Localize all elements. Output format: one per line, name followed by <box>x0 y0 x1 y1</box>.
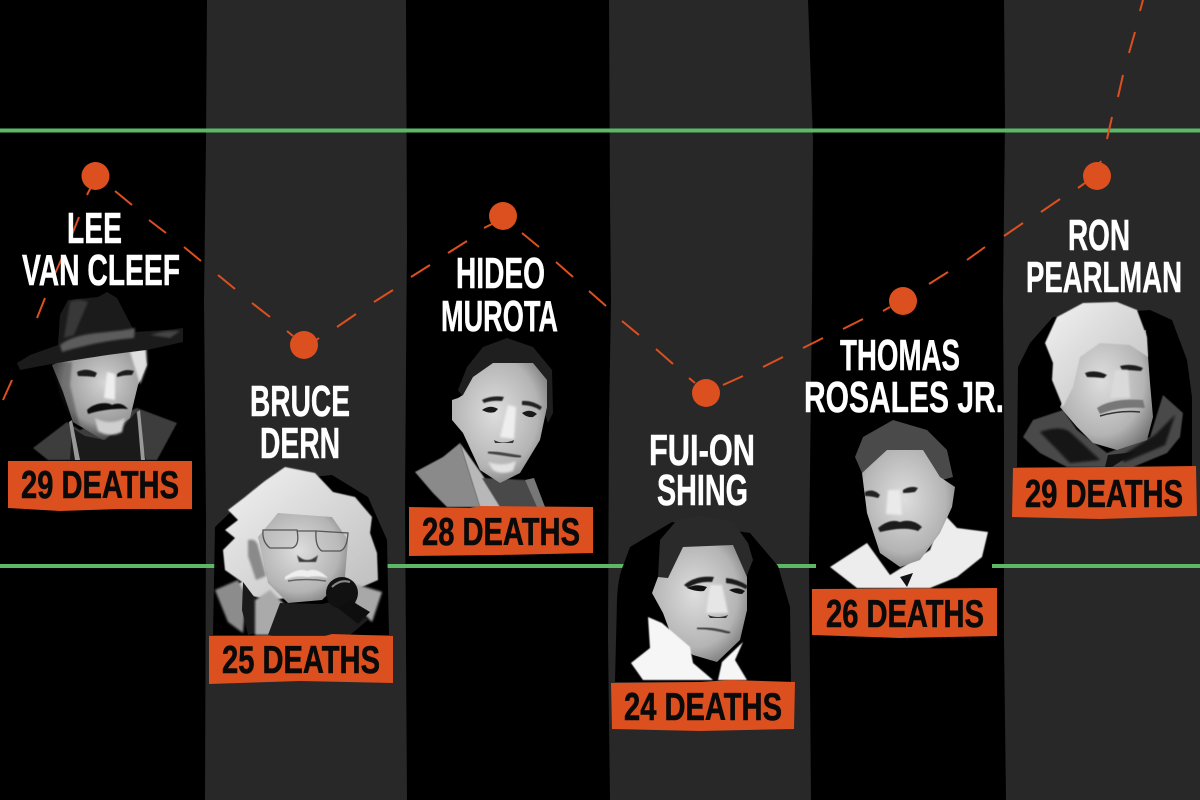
deaths label: 29: 29 DEATHS <box>21 464 179 507</box>
person: Fui-On Shing <box>611 426 795 731</box>
deaths label: 25 <box>209 634 393 684</box>
name: Thomas Rosales Jr. <box>804 331 1004 422</box>
name: Bruce Dern: DERN <box>260 419 340 468</box>
reference lines <box>0 128 1200 568</box>
name: Fui-On Shing <box>649 426 755 515</box>
name: Fui-On Shing: FUI-ON <box>649 426 755 475</box>
name: Hideo Murota: HIDEO <box>456 249 545 298</box>
person: Lee Van Cleef <box>8 204 192 511</box>
name: Fui-On Shing: SHING <box>657 466 748 515</box>
name: Thomas Rosales Jr.: THOMAS <box>840 331 960 380</box>
portrait: Thomas Rosales Jr. <box>816 420 992 590</box>
deaths label: 28 <box>409 506 593 556</box>
deaths label: 25: 25 DEATHS <box>222 639 380 682</box>
portrait: Ron Pearlman <box>1017 302 1192 467</box>
person: Bruce Dern <box>209 377 393 684</box>
person: Hideo Murota <box>409 249 593 556</box>
portrait: Bruce Dern <box>213 467 389 635</box>
name: Bruce Dern <box>250 377 350 468</box>
person: Ron Pearlman <box>1012 211 1197 519</box>
deaths label: 28: 28 DEATHS <box>422 511 580 554</box>
portrait: Fui-On Shing <box>615 515 791 682</box>
name: Lee Van Cleef <box>22 204 180 295</box>
name: Thomas Rosales Jr.: ROSALES JR. <box>804 373 1004 422</box>
name: Ron Pearlman <box>1026 211 1182 302</box>
portrait: Lee Van Cleef <box>17 292 183 460</box>
name: Hideo Murota <box>441 249 558 341</box>
deaths label: 24 <box>611 680 795 731</box>
name: Bruce Dern: BRUCE <box>250 377 350 426</box>
dashed trend line <box>3 0 1143 400</box>
name: Ron Pearlman: RON <box>1068 211 1130 260</box>
data points <box>82 162 1111 407</box>
person: Thomas Rosales Jr. <box>804 331 1004 638</box>
name: Hideo Murota: MUROTA <box>441 292 558 341</box>
deaths label: 26 <box>812 588 997 638</box>
portrait: Hideo Murota <box>415 338 553 507</box>
name: Lee Van Cleef: LEE <box>67 204 122 253</box>
name: Lee Van Cleef: VAN CLEEF <box>22 246 180 295</box>
deaths label: 29 <box>8 461 192 511</box>
deaths label: 26: 26 DEATHS <box>826 593 984 636</box>
deaths label: 24: 24 DEATHS <box>624 686 782 729</box>
